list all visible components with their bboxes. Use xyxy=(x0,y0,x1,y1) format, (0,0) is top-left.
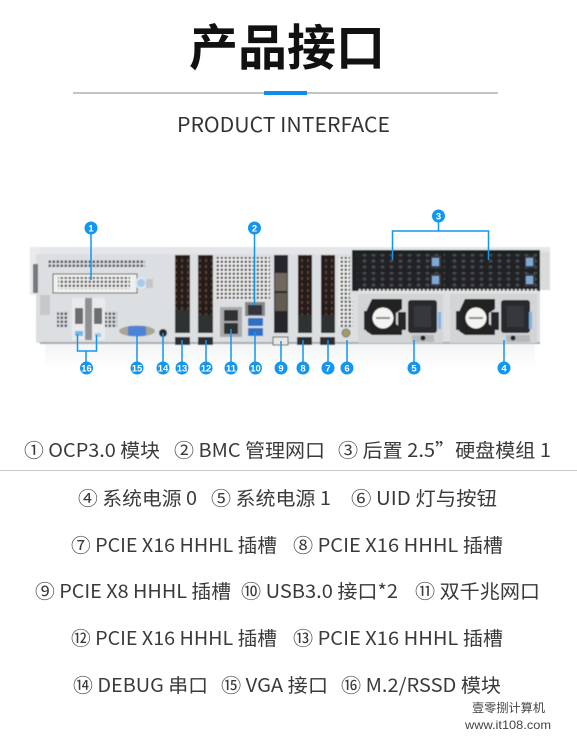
marker 1: 1 xyxy=(88,224,94,234)
M.2/RSSD module xyxy=(57,298,117,340)
callout markers xyxy=(80,210,510,374)
debug port xyxy=(159,329,167,337)
PCIe slot 13 xyxy=(175,255,190,345)
legend row 2: ⑤ 系统电源 1 xyxy=(211,484,331,511)
marker 5: 5 xyxy=(411,364,417,374)
centre vent xyxy=(216,257,270,300)
marker 16: 16 xyxy=(81,364,92,374)
UID button xyxy=(342,329,350,337)
server rear panel illustration xyxy=(30,247,550,368)
legend row 2: ④ 系统电源 0 xyxy=(78,484,197,511)
top vent row xyxy=(48,260,145,267)
PCIe slot 7 xyxy=(320,255,335,345)
marker 3: 3 xyxy=(436,212,441,222)
PCIe X8 slot 9 xyxy=(273,255,288,345)
legend row 5: ⑬ PCIE X16 HHHL 插槽 xyxy=(293,624,503,651)
marker 6: 6 xyxy=(344,364,350,374)
marker 10: 10 xyxy=(250,364,261,374)
marker 15 xyxy=(130,362,144,374)
PCIe slot 8 xyxy=(297,255,312,345)
marker 8 xyxy=(296,362,310,374)
rear 2.5 inch drive bays xyxy=(352,250,540,292)
system power supply 0 xyxy=(450,294,537,343)
marker 6 xyxy=(340,362,354,374)
marker 11: 11 xyxy=(226,364,237,374)
marker 11 xyxy=(224,362,238,374)
marker 13: 13 xyxy=(177,364,187,374)
legend row 5 xyxy=(71,624,503,651)
marker 9: 9 xyxy=(278,364,284,374)
marker 7 xyxy=(322,362,334,374)
callout leader lines xyxy=(78,216,504,368)
USB3.0 ports xyxy=(248,318,263,336)
side vent xyxy=(339,257,353,327)
legend row 6: ⑭ DEBUG 串口 xyxy=(73,671,208,698)
watermark: www.it108.com xyxy=(464,718,551,732)
VGA port xyxy=(119,326,155,336)
marker 12 xyxy=(200,362,212,374)
marker 4: 4 xyxy=(501,364,507,374)
legend row 1 xyxy=(24,436,551,463)
legend row 4 xyxy=(35,577,540,604)
dual gigabit ports xyxy=(220,307,242,337)
marker 7: 7 xyxy=(325,364,331,374)
marker 14: 14 xyxy=(158,364,169,374)
PCIe slot 12 xyxy=(198,255,213,345)
marker 10 xyxy=(249,362,262,374)
section divider xyxy=(0,470,577,471)
subtitle: PRODUCT INTERFACE xyxy=(177,108,390,138)
legend row 6: ⑯ M.2/RSSD 模块 xyxy=(341,671,501,698)
marker 15: 15 xyxy=(132,364,143,374)
legend row 3 xyxy=(71,531,503,558)
legend row 6 xyxy=(73,671,501,698)
reflection under server xyxy=(45,344,535,368)
marker 1 xyxy=(84,222,98,234)
legend row 4: ⑩ USB3.0 接口*2 xyxy=(241,577,398,604)
legend row 6: ⑮ VGA 接口 xyxy=(221,671,328,698)
legend list xyxy=(24,436,551,698)
watermark xyxy=(464,700,551,732)
legend row 1: ③ 后置 2.5”硬盘模组 1 xyxy=(338,436,551,463)
watermark: 壹零捌计算机 xyxy=(472,700,545,715)
marker 8: 8 xyxy=(300,364,306,374)
legend row 3: ⑦ PCIE X16 HHHL 插槽 xyxy=(71,531,277,558)
legend row 3: ⑧ PCIE X16 HHHL 插槽 xyxy=(293,531,503,558)
marker 16 xyxy=(80,362,93,374)
legend row 4: ⑨ PCIE X8 HHHL 插槽 xyxy=(35,577,231,604)
legend row 1: ① OCP3.0 模块 xyxy=(24,436,160,463)
marker 4 xyxy=(498,362,510,374)
marker 9 xyxy=(274,362,288,374)
OCP module plate xyxy=(53,274,153,293)
chassis body xyxy=(30,247,550,344)
BMC port xyxy=(245,302,265,316)
marker 3 xyxy=(432,210,445,222)
legend row 2: ⑥ UID 灯与按钮 xyxy=(351,484,497,511)
legend row 1: ② BMC 管理网口 xyxy=(174,436,325,463)
legend row 4: ⑪ 双千兆网口 xyxy=(415,577,540,604)
title divider with blue accent xyxy=(73,91,498,95)
title: 产品接口 xyxy=(189,9,385,80)
marker 12: 12 xyxy=(201,364,211,374)
legend row 5: ⑫ PCIE X16 HHHL 插槽 xyxy=(71,624,277,651)
marker 2: 2 xyxy=(252,224,257,234)
marker 13 xyxy=(176,362,188,374)
marker 2 xyxy=(248,222,261,234)
marker 14 xyxy=(156,362,170,374)
legend row 2 xyxy=(78,484,497,511)
marker 5 xyxy=(408,362,420,374)
system power supply 1 xyxy=(358,294,443,343)
